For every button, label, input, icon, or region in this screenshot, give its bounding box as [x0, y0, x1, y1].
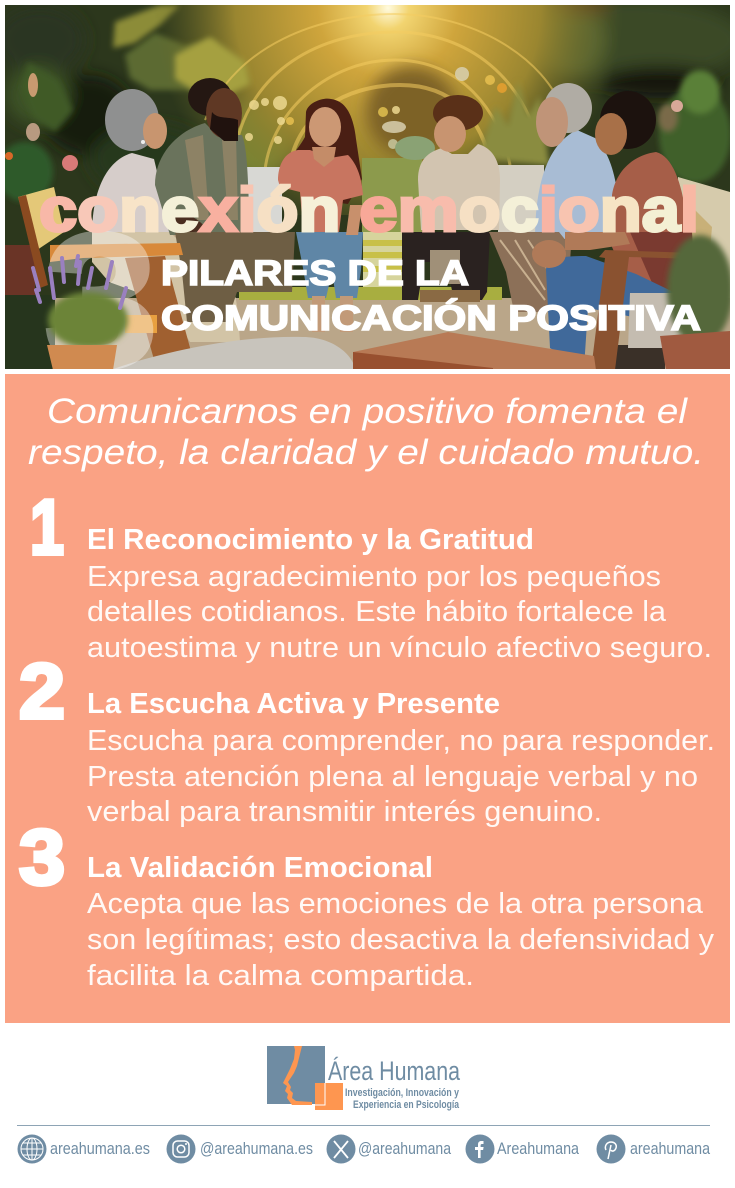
floor: [5, 298, 730, 370]
logo wordmark: Área Humana: [328, 1056, 461, 1086]
pillar 3 text: facilita la calma compartida.: [87, 960, 474, 992]
logo tagline: Investigación, Innovación y: [345, 1087, 460, 1099]
number 3: 3: [19, 813, 65, 901]
social: website: areahumana.es: [50, 1139, 150, 1158]
icon: pinterest: [596, 1134, 626, 1164]
panel: salmon content background: [5, 374, 730, 1023]
pillar 1 heading: El Reconocimiento y la Gratitud: [87, 524, 534, 556]
pillar 2: [19, 647, 715, 828]
icon: instagram: [166, 1134, 196, 1164]
left plant, pot and chair: [5, 187, 64, 370]
social: pinterest: [596, 1134, 710, 1164]
bokeh lights: [245, 67, 507, 149]
person: bearded man: [155, 78, 295, 322]
floor cushions: [113, 332, 596, 370]
pillar 2 text: Presta atención plena al lenguaje verbal y no: [87, 761, 698, 793]
header illustration: family group talking in a sunlit garden: [5, 5, 730, 369]
pillar 2 text: verbal para transmitir interés genuino.: [87, 796, 602, 828]
icon: X: [326, 1134, 356, 1164]
garden foliage background: [0, 0, 735, 202]
social: instagram: @areahumana.es: [200, 1139, 313, 1158]
logo mark: profile face: [267, 1046, 343, 1110]
lawn and round bush: [362, 136, 435, 290]
person: older woman: [92, 89, 240, 342]
social: instagram: [166, 1134, 313, 1164]
number 1: 1: [30, 483, 64, 571]
pillar 1 text: [87, 561, 712, 664]
right garden plant: [658, 70, 731, 183]
older woman hair and face: [105, 89, 167, 151]
pillar 2 heading: La Escucha Activa y Presente: [87, 688, 500, 720]
sunlight glow: [164, 5, 609, 215]
pillar 3 text: son legítimas; esto desactiva la defensividad y: [87, 924, 715, 956]
teenager head: [433, 95, 483, 152]
white sofa segments: [247, 165, 730, 312]
social: website: [18, 1134, 150, 1164]
bearded man head: [188, 78, 242, 141]
pillar 1: [30, 483, 712, 664]
pillar 1 text: autoestima y nutre un vínculo afectivo seguro.: [87, 632, 712, 664]
logo tagline: Experiencia en Psicología: [353, 1099, 460, 1111]
intro statement: Comunicarnos en positivo fomenta el: [47, 392, 688, 431]
number 2: 2: [19, 647, 65, 735]
logo tagline: [345, 1087, 460, 1111]
pillar 3: [19, 813, 715, 992]
subtitle line 1: PILARES DE LA: [161, 254, 469, 293]
person: young man: [532, 91, 696, 368]
lavender plant in terracotta pot: [33, 256, 128, 370]
social: pinterest: areahumana: [630, 1139, 710, 1158]
pillar 1 text: Expresa agradecimiento por los pequeños: [87, 561, 661, 593]
tall grass: [478, 81, 550, 166]
person: young woman: [278, 99, 363, 332]
older man head: [536, 83, 592, 147]
pillar 3 text: [87, 888, 715, 992]
sun ray arcs: [205, 14, 565, 170]
social: facebook: [466, 1134, 579, 1164]
title: conexión emocional: conexión emocional: [39, 176, 699, 245]
social: facebook: Areahumana: [497, 1139, 579, 1158]
subtitle line 2: COMUNICACIÓN POSITIVA: [161, 298, 701, 338]
wooden armchairs: [50, 243, 695, 370]
large translucent number 3: 3: [44, 195, 158, 407]
young man head: [595, 91, 656, 155]
social: X: @areahumana: [358, 1139, 451, 1158]
pillar 2 text: Escucha para comprender, no para responder.: [87, 725, 715, 757]
logo: Área Humana: [267, 1046, 461, 1111]
pillar 3 text: Acepta que las emociones de la otra persona: [87, 888, 704, 920]
pillar 2 text: [87, 725, 715, 828]
intro statement: respeto, la claridad y el cuidado mutuo.: [28, 433, 704, 472]
person: older man: [489, 83, 618, 312]
person: teenager: [402, 95, 500, 302]
pillar 3 heading: La Validación Emocional: [87, 852, 433, 884]
right plant and pot: [660, 235, 733, 370]
social: X: [326, 1134, 451, 1164]
icon: facebook: [466, 1134, 494, 1164]
icon: globe: [18, 1134, 46, 1164]
intro statement: [28, 392, 704, 472]
pillar 1 text: detalles cotidianos. Este hábito fortalece la: [87, 596, 667, 628]
